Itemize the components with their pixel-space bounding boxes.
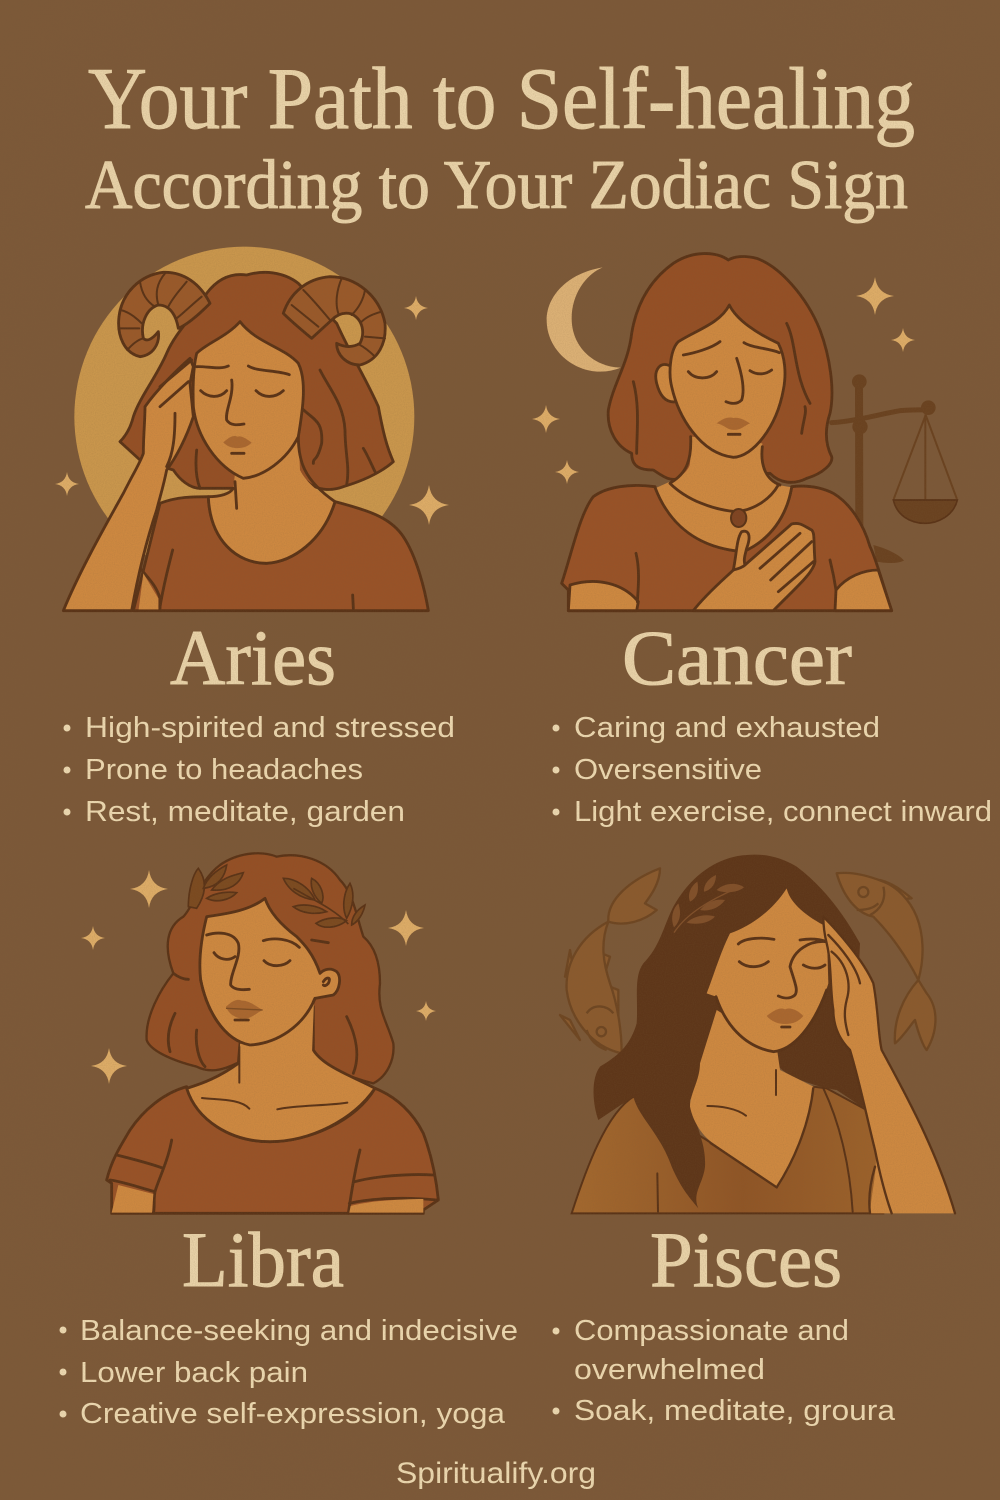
- panel: Aries illustration: [63, 247, 428, 611]
- heading: Cancer: Cancer: [622, 614, 852, 701]
- long dark hair: [594, 855, 867, 1208]
- neck and chest: [655, 437, 792, 552]
- neck and chest: [187, 1007, 375, 1142]
- hair: [608, 254, 832, 482]
- heading: Aries: Aries: [170, 614, 336, 701]
- list: Cancer traits: Light exercise, connect inward: [574, 796, 992, 828]
- heading: Pisces: Pisces: [650, 1216, 842, 1303]
- hand on chest: [693, 523, 815, 611]
- list: Cancer traits: Oversensitive: [574, 754, 762, 786]
- right fish: [837, 873, 935, 1050]
- face: [200, 898, 340, 1045]
- list: Libra traits: Creative self-expression, yoga: [80, 1398, 506, 1430]
- list: Pisces traits: [552, 1315, 896, 1427]
- ear: [656, 365, 677, 402]
- panel: Cancer illustration: [547, 254, 957, 611]
- face: [193, 322, 303, 478]
- right horn: [283, 277, 385, 365]
- raised arm and hand: [823, 917, 955, 1213]
- facial features: [197, 366, 289, 453]
- list: Pisces traits: Compassionate and: [574, 1315, 849, 1347]
- heading: Libra: Libra: [182, 1216, 344, 1303]
- panel: Libra illustration: [107, 853, 438, 1213]
- laurel right: [283, 878, 365, 927]
- neck and chest: [690, 1010, 813, 1187]
- chest and neck: [208, 433, 335, 563]
- list: Aries traits: [64, 712, 455, 828]
- shirt: [133, 497, 428, 611]
- facial features: [738, 938, 827, 1027]
- shirt: [562, 485, 892, 611]
- crescent moon: [547, 267, 621, 372]
- list: Pisces traits: overwhelmed: [574, 1354, 765, 1386]
- face: [670, 305, 785, 457]
- list: Cancer traits: [552, 712, 992, 828]
- facial features: [207, 933, 329, 1020]
- shirt: [107, 1087, 438, 1213]
- raised arm and hand: [63, 358, 193, 611]
- necklace: [670, 483, 778, 527]
- list: Aries traits: Prone to headaches: [85, 754, 363, 786]
- list: Pisces traits: Soak, meditate, groura: [574, 1395, 896, 1427]
- collarbones: [202, 1047, 347, 1109]
- list: Cancer traits: Caring and exhausted: [574, 712, 880, 744]
- list: Libra traits: [60, 1315, 518, 1430]
- laurel sprig: [672, 875, 744, 933]
- balance scale: [832, 374, 957, 563]
- list: Libra traits: Lower back pain: [80, 1357, 308, 1389]
- list: Libra traits: Balance-seeking and indecisive: [80, 1315, 518, 1347]
- sleeves and arms: [110, 1140, 437, 1213]
- left fish: [560, 868, 660, 1053]
- list: Aries traits: Rest, meditate, garden: [85, 796, 405, 828]
- laurel left: [188, 865, 243, 908]
- list: Aries traits: High-spirited and stressed: [85, 712, 455, 744]
- shirt: [572, 1087, 883, 1213]
- hair: [147, 853, 394, 1083]
- face: [707, 888, 828, 1052]
- panel: Pisces illustration: [560, 855, 955, 1213]
- title: Your Path to Self-healing: [88, 51, 915, 148]
- facial features: [683, 342, 779, 434]
- title: [85, 51, 915, 224]
- sparkle stars: [55, 277, 915, 1084]
- left horn: [119, 272, 210, 357]
- halo circle: [74, 247, 414, 587]
- title: According to Your Zodiac Sign: [85, 147, 908, 224]
- sleeve arms: [568, 553, 892, 611]
- hair: [120, 272, 393, 489]
- footer: website: Spiritualify.org: [396, 1457, 596, 1490]
